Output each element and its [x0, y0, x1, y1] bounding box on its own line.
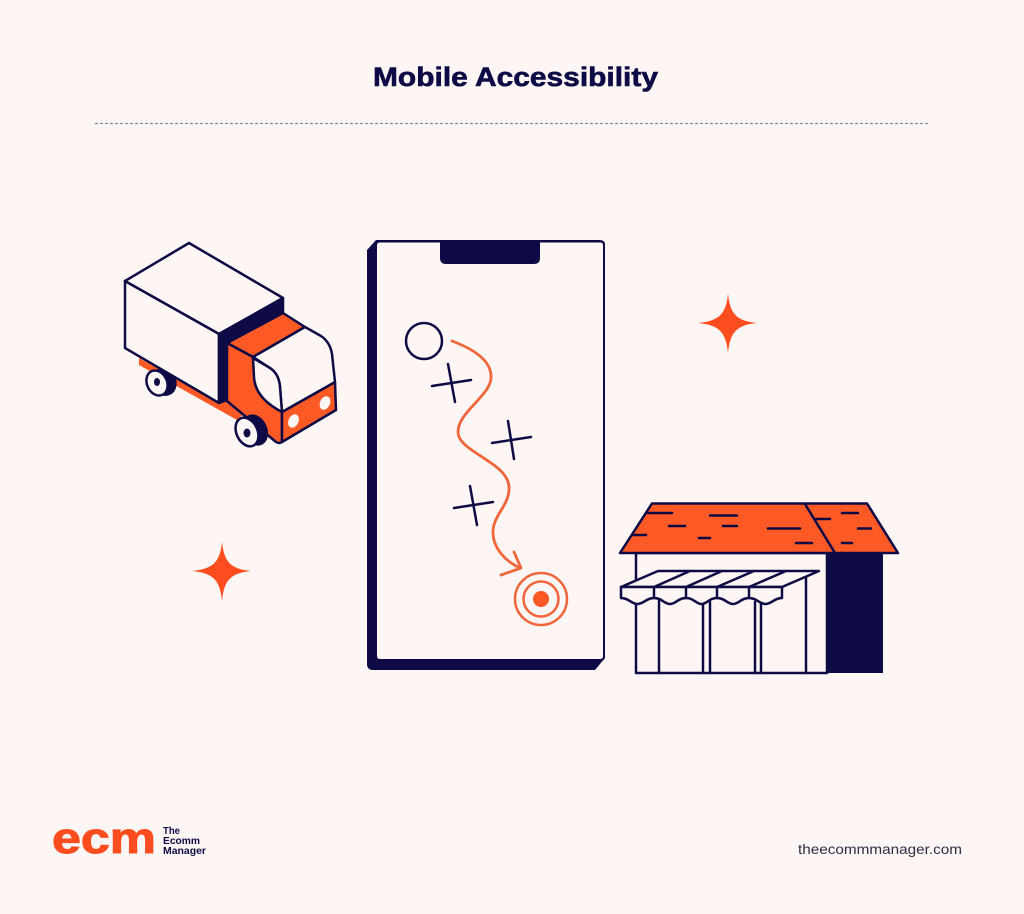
shop columns	[659, 577, 806, 673]
map obstacle crosses	[432, 364, 531, 525]
rear wheel	[142, 366, 179, 399]
shop side wall	[827, 553, 883, 673]
icon: delivery truck	[125, 243, 336, 450]
cargo box top	[125, 243, 283, 334]
title: Mobile Accessibility	[373, 62, 658, 92]
cab roof	[227, 313, 305, 357]
front wheel	[231, 412, 271, 450]
shop wall	[636, 553, 827, 673]
headlights	[286, 395, 332, 429]
destination target	[515, 573, 567, 625]
logo tagline	[163, 826, 206, 857]
phone body shadow	[367, 240, 605, 670]
website url: theecommmanager.com	[798, 841, 962, 857]
side window	[253, 358, 282, 412]
cargo box back panel	[219, 298, 283, 403]
logo wordmark: ecm	[52, 814, 156, 863]
cab front lower	[282, 382, 336, 442]
phone screen	[376, 242, 604, 660]
icon: sparkle top right	[698, 294, 757, 353]
logo tagline: The	[163, 826, 180, 837]
awning	[621, 571, 819, 604]
logo tagline: Manager	[163, 846, 206, 857]
logo	[52, 814, 206, 863]
cargo box side	[125, 281, 219, 403]
icon: sparkle bottom left	[192, 542, 251, 601]
icon: storefront	[620, 504, 898, 673]
icon: smartphone	[367, 240, 605, 670]
route arrow	[452, 341, 521, 575]
truck chassis	[139, 358, 248, 420]
roof	[620, 504, 898, 553]
roof tiles	[633, 513, 871, 543]
logo tagline: Ecomm	[163, 836, 200, 847]
phone notch	[440, 240, 540, 264]
map start circle	[406, 323, 442, 359]
cab side	[227, 343, 282, 443]
windshield	[253, 327, 335, 412]
